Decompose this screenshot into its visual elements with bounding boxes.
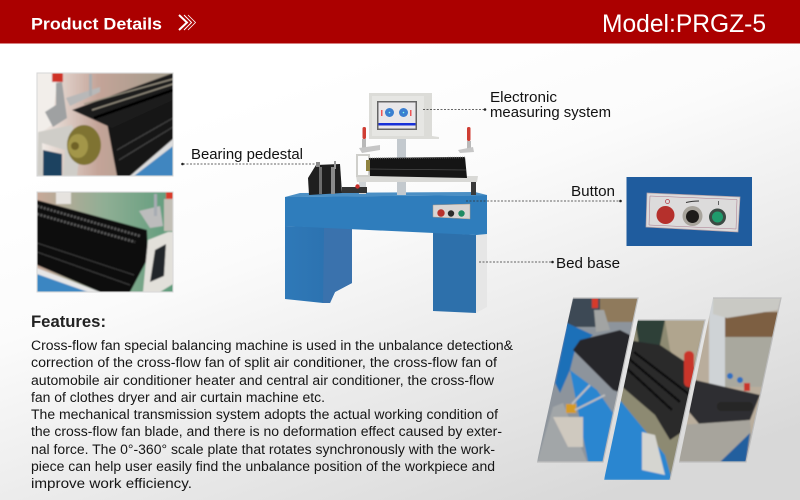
features section [31, 312, 513, 491]
photo: button panel close-up [626, 177, 752, 246]
electronic measuring box [369, 93, 439, 139]
callout: bearing pedestal: Bearing pedestal [191, 146, 303, 163]
bearing pedestal [308, 161, 367, 195]
callout: bed base: Bed base [556, 255, 620, 272]
control plate [646, 193, 740, 232]
photo panel: slanted left [537, 298, 640, 462]
features body text: improve work efficiency. [31, 476, 192, 491]
features body text: The mechanical transmission system adopts the actual working condition of [31, 407, 498, 422]
features body text [31, 338, 513, 491]
red stop button [656, 206, 674, 224]
photo panel: slanted right [679, 298, 781, 462]
features body text: automobile air conditioner heater and central air conditioner, the cross-flow [31, 373, 494, 388]
photo frame lower [37, 192, 173, 292]
header banner [0, 0, 800, 44]
clamps with red handles [357, 127, 476, 195]
features body text: the cross-flow fan blade, and there is no deformation effect caused by exter- [31, 424, 502, 439]
touch screen [377, 101, 417, 130]
heading: features: Features: [31, 312, 106, 331]
features body text: correction of the cross-flow fan of split air conditioner, the cross-flow fan of [31, 355, 497, 370]
photo: fan blade, lower left [37, 192, 173, 292]
features body text: piece can help user easily find the unbalance position of the workpiece and [31, 459, 495, 474]
icon: double chevron [179, 15, 196, 30]
features body text: fan of clothes dryer and air curtain machine etc. [31, 390, 325, 405]
photo: fan blade clamp, top left [37, 73, 173, 176]
heading: product details: Product Details [31, 14, 162, 34]
features body text: Cross-flow fan special balancing machine is used in the unbalance detection& [31, 338, 513, 353]
cross-flow fan [366, 157, 467, 178]
heading: model: Model:PRGZ-5 [602, 10, 766, 38]
control buttons on bed [433, 204, 470, 219]
photo frame top [37, 73, 173, 176]
features body text: nal force. The 0°-360° scale plate that rotates synchronously with the work- [31, 442, 495, 457]
machine illustration [285, 93, 487, 313]
callout: electronic measuring system: measuring system [490, 104, 611, 121]
photo panel: slanted centre [600, 320, 705, 480]
selector dial [682, 206, 702, 226]
measuring column [397, 139, 406, 195]
work shelf [356, 176, 478, 182]
green start button [709, 208, 726, 226]
callout: button: Button [571, 183, 615, 200]
callout: electronic measuring system: Electronic [490, 89, 558, 106]
callout: electronic measuring system [423, 89, 611, 121]
bed base [285, 192, 487, 313]
